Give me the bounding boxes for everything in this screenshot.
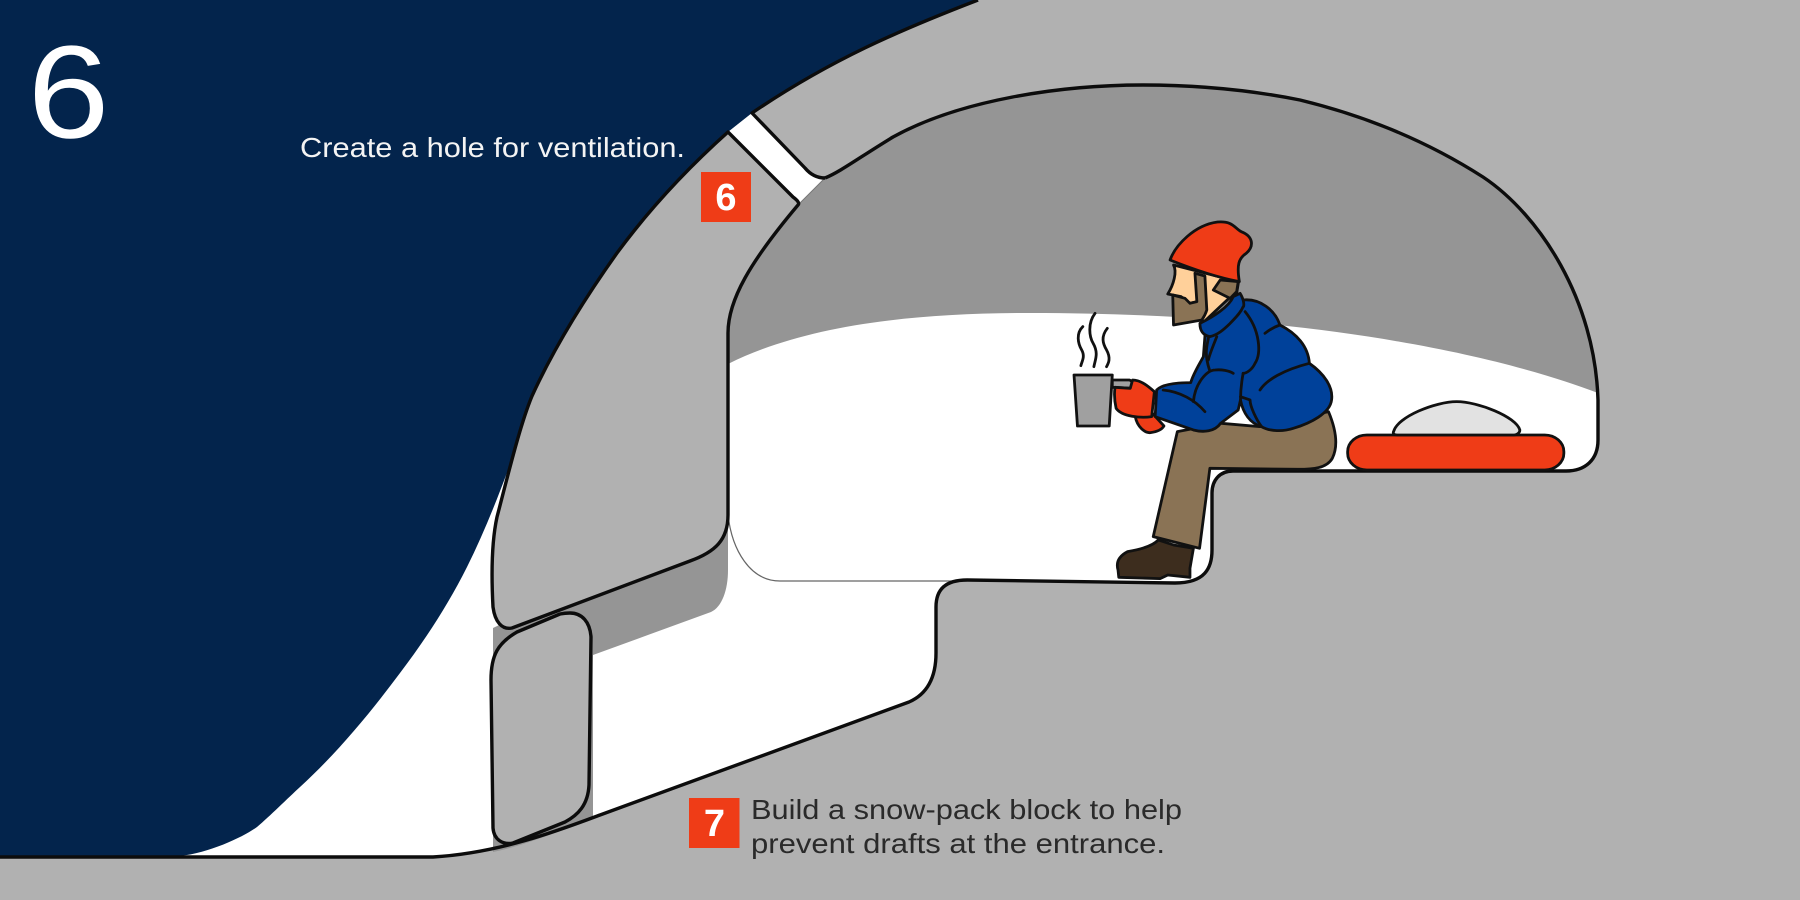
night sky panel: [0, 0, 978, 857]
thin edge of ventilation opening: [798, 178, 825, 205]
ventilation instruction: Create a hole for ventilation.: [300, 132, 685, 163]
back wall shadow under the roof block: [493, 515, 728, 852]
beard: [1173, 273, 1207, 325]
entrance block instruction: [751, 794, 1182, 859]
hat: [1170, 222, 1251, 282]
sleeping pad: [1348, 435, 1564, 470]
cave and floor outline: [0, 85, 1598, 857]
large step number: 6: [28, 18, 110, 166]
badge: number 7: [689, 798, 740, 848]
entrance block instruction: prevent drafts at the entrance.: [751, 828, 1165, 859]
trousers: [1153, 412, 1336, 548]
badge: number 7: 7: [704, 803, 725, 845]
hair: [1213, 280, 1238, 298]
boot: [1117, 540, 1193, 579]
cave ceiling: shaded dome: [728, 85, 1598, 420]
cave interior: white snow space: [178, 313, 1598, 858]
badge: number 6: 6: [715, 177, 737, 219]
lower mitten: [1135, 413, 1164, 433]
mug: [1074, 375, 1133, 426]
snow-pack block at entrance: [491, 613, 591, 843]
snow outer surface outline: [752, 0, 978, 178]
badge: number 6: [701, 172, 751, 222]
face: [1168, 265, 1239, 322]
jacket collar: [1200, 293, 1244, 337]
person sitting with mug and sleeping gear: [1074, 222, 1564, 579]
sleeping bag: [1393, 402, 1520, 435]
jacket: [1155, 300, 1332, 431]
back wall contour line: [728, 515, 967, 581]
entrance block instruction: Build a snow-pack block to help: [751, 794, 1182, 825]
snow wall block with vent edge: [492, 132, 799, 628]
ventilation hole: [728, 113, 825, 205]
upper mitten: [1114, 380, 1154, 417]
jacket quilting lines: [1163, 312, 1309, 427]
steam: [1078, 313, 1109, 367]
